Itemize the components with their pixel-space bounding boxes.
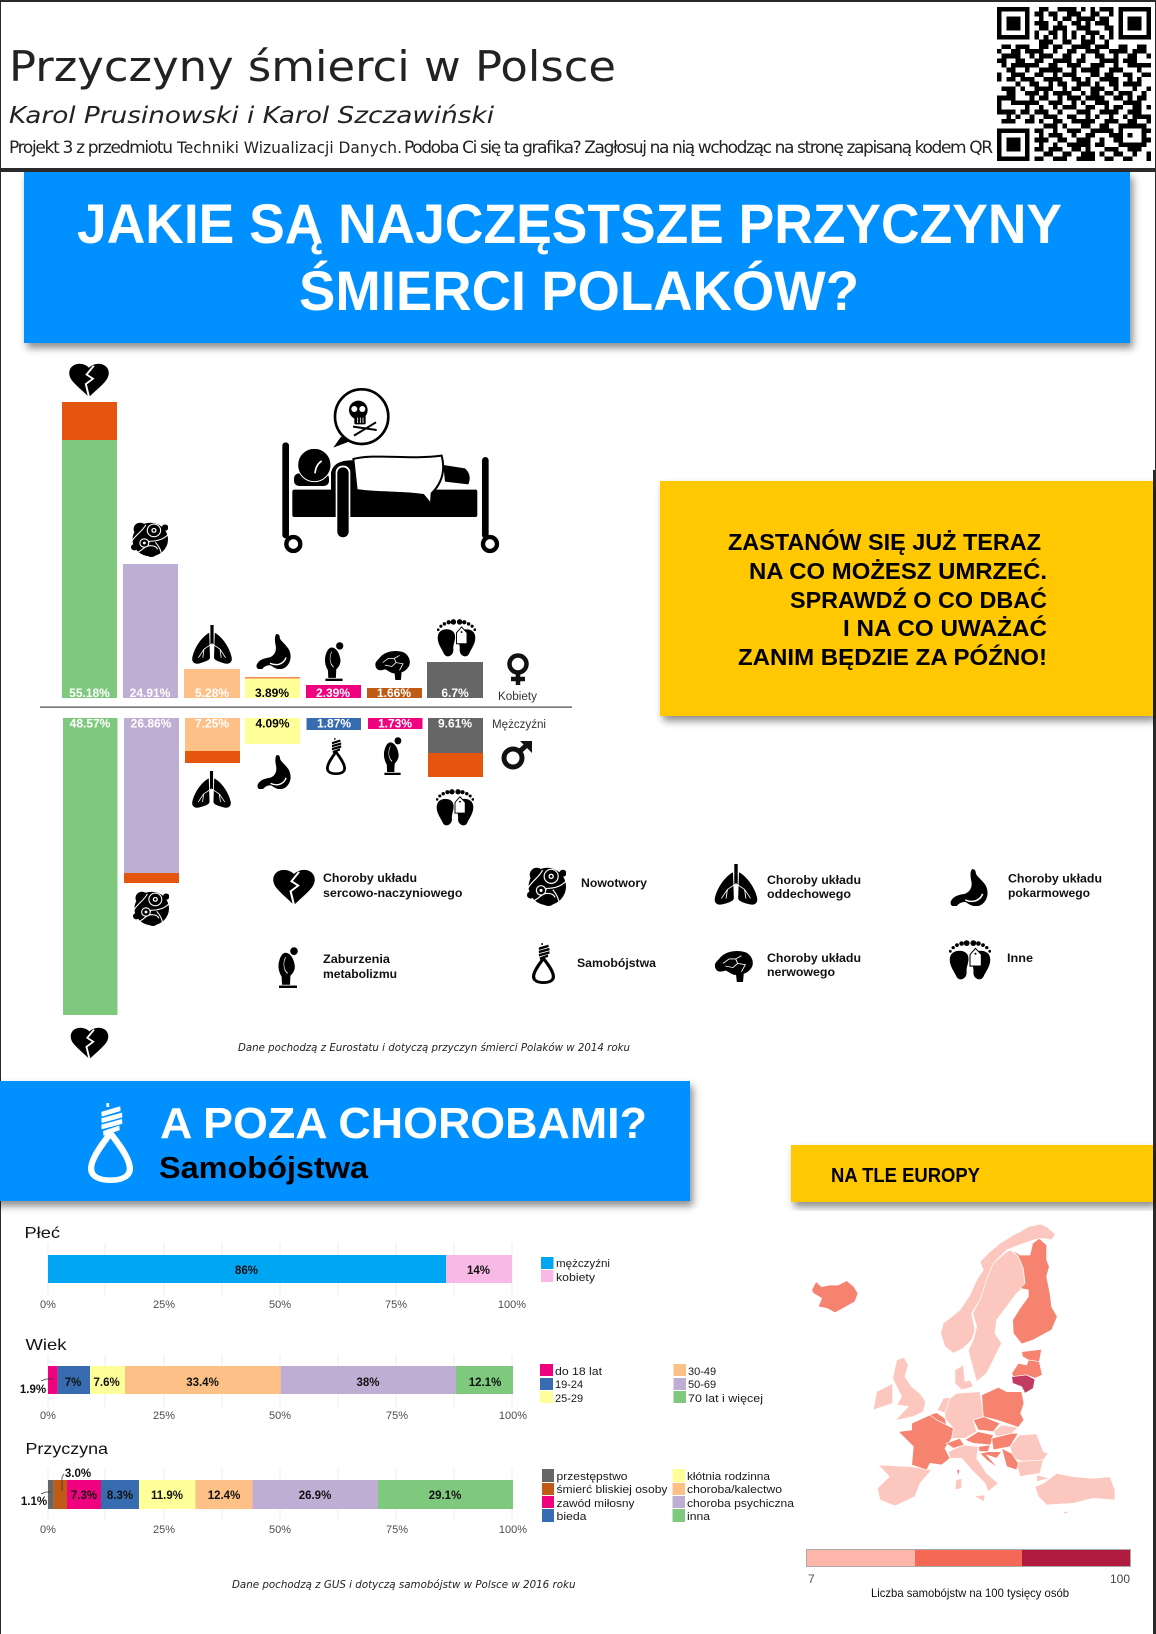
- source note: Eurostat: Dane pochodzą z Eurostatu i dotyczą przyczyn śmierci Polaków w 2014 roku: [238, 1041, 630, 1054]
- chart: age: 25-29: [555, 1393, 583, 1405]
- icon: mars: [504, 741, 532, 767]
- chart: age: 7%: [65, 1377, 81, 1389]
- chart: cause: [21, 1441, 795, 1536]
- chart: age: 38%: [356, 1377, 380, 1389]
- chart: cause: choroba/kalectwo: [687, 1484, 782, 1496]
- map: Europe: [812, 1224, 1115, 1514]
- icon: brain legend: [715, 951, 753, 982]
- legend text: nervous: [767, 951, 861, 979]
- chart: cause: przestępstwo: [556, 1471, 628, 1483]
- chart: age: 30-49: [688, 1366, 716, 1378]
- panel: main banner: [24, 172, 1130, 343]
- banner subheading: Samobójstwa: [159, 1150, 369, 1185]
- callout: think now: NA CO MOŻESZ UMRZEĆ.: [749, 557, 1047, 584]
- source note: GUS: Dane pochodzą z GUS i dotyczą samobójstw w Polsce w 2016 roku: [232, 1578, 576, 1591]
- panel: suicide banner: [0, 1081, 690, 1201]
- icon: metabolic men: [384, 737, 401, 775]
- icon: stomach women: [256, 634, 291, 669]
- chart: gender: 100%: [498, 1299, 526, 1311]
- legend text: nervous: nerwowego: [767, 965, 835, 979]
- chart: age: 25%: [153, 1410, 175, 1422]
- icon: feet legend: [949, 940, 991, 979]
- chart: age: 1.9%: [20, 1384, 46, 1396]
- heading: age: Wiek: [26, 1337, 68, 1354]
- chart: age: 19-24: [555, 1379, 583, 1391]
- chart: gender: 0%: [40, 1299, 56, 1311]
- chart: cause: kłótnia rodzinna: [687, 1471, 771, 1483]
- bar chart: women: 2.39%: [316, 686, 350, 700]
- legend text: digestive: pokarmowego: [1008, 886, 1090, 900]
- chart: age: 12.1%: [469, 1377, 501, 1389]
- bar chart: women: 3.89%: [255, 686, 289, 700]
- icon: metabolic women: [325, 642, 343, 681]
- chart: age: 75%: [386, 1410, 408, 1422]
- legend text: nervous: Choroby układu: [767, 951, 861, 965]
- chart: cause: choroba psychiczna: [687, 1498, 795, 1510]
- bar chart: women: 5.28%: [195, 686, 229, 700]
- legend text: digestive: Choroby układu: [1008, 872, 1102, 886]
- label: men: Mężczyźni: [492, 719, 546, 731]
- chart: gender: 75%: [385, 1299, 407, 1311]
- chart: cause: 7.3%: [71, 1490, 97, 1502]
- callout: think now: [660, 481, 1153, 716]
- icon: venus: [510, 656, 526, 685]
- chart: age: 100%: [499, 1410, 527, 1422]
- chart: gender: 14%: [467, 1265, 490, 1277]
- bar chart: men: 4.09%: [255, 716, 290, 730]
- icon: heart men: [71, 1028, 108, 1059]
- chart: cause: 100%: [499, 1524, 527, 1536]
- speech bubble with skull: [333, 389, 388, 448]
- bar chart: women: 55.18%: [69, 686, 110, 700]
- legend text: cardiovascular: sercowo-naczyniowego: [323, 886, 462, 900]
- bar chart: men: 1.87%: [317, 716, 351, 730]
- icon: brain women: [375, 651, 410, 680]
- bar chart: women: 1.66%: [377, 686, 411, 700]
- icon: heart women: [69, 364, 109, 397]
- chart: age: 50%: [269, 1410, 291, 1422]
- chart: cause: 12.4%: [208, 1490, 240, 1502]
- banner heading: ŚMIERCI POLAKÓW?: [299, 259, 859, 322]
- bar chart: men: [63, 716, 483, 1015]
- project note: Techniki Wizualizacji Danych.: [176, 138, 402, 157]
- chart: cause: 50%: [269, 1524, 291, 1536]
- chart: cause: 1.1%: [21, 1496, 47, 1508]
- chart: gender: 50%: [269, 1299, 291, 1311]
- legend text: respiratory: Choroby układu: [767, 873, 861, 887]
- icon: white noose: [88, 1103, 133, 1183]
- chart: gender: mężczyźni: [556, 1258, 610, 1270]
- icon: cancer legend: [527, 868, 566, 906]
- icon: heart legend: [273, 870, 315, 905]
- title: Przyczyny śmierci w Polsce: [9, 42, 616, 91]
- chart: cause: 3.0%: [65, 1468, 91, 1480]
- bar chart: women: 24.91%: [130, 686, 171, 700]
- chart: cause: 25%: [153, 1524, 175, 1536]
- axis divider: [40, 706, 572, 708]
- map legend: 7: [808, 1572, 815, 1586]
- legend text: cardiovascular: [323, 871, 462, 900]
- icon: lungs men: [192, 771, 231, 808]
- chart: cause: zawód miłosny: [556, 1498, 635, 1510]
- icon: patient in bed: [286, 389, 497, 551]
- chart: gender: kobiety: [556, 1272, 596, 1284]
- callout: think now: ZANIM BĘDZIE ZA PÓŹNO!: [738, 643, 1047, 670]
- chart: age: 70 lat i więcej: [688, 1393, 763, 1405]
- legend text: suicide: Samobójstwa: [577, 956, 656, 970]
- chart: age: [20, 1337, 763, 1422]
- banner heading: JAKIE SĄ NAJCZĘSTSZE PRZYCZYNY: [77, 192, 1062, 255]
- QR code: [997, 7, 1151, 161]
- chart: gender: 86%: [235, 1265, 258, 1277]
- callout: think now: ZASTANÓW SIĘ JUŻ TERAZ: [728, 528, 1041, 555]
- legend text: metabolic: [323, 952, 397, 981]
- chart: gender: [24, 1225, 610, 1311]
- legend text: cancer: Nowotwory: [581, 876, 647, 890]
- icon: noose legend: [532, 943, 555, 984]
- legend text: respiratory: [767, 873, 861, 901]
- bar chart: men: 1.73%: [378, 716, 412, 730]
- legend text: cardiovascular: Choroby układu: [323, 871, 417, 885]
- bar chart: men: 48.57%: [70, 716, 111, 730]
- legend text: digestive: [1008, 872, 1102, 900]
- project note: Projekt 3 z przedmiotu: [9, 138, 173, 158]
- icon: stomach men: [257, 755, 291, 789]
- heading: gender: Płeć: [24, 1225, 60, 1242]
- chart: gender: 25%: [153, 1299, 175, 1311]
- panel: Europe heading: NA TLE EUROPY: [831, 1164, 980, 1187]
- heading: cause: Przyczyna: [26, 1441, 108, 1458]
- header: [9, 7, 1151, 161]
- icon: metabolic legend: [278, 947, 298, 988]
- bar chart: men: 7.25%: [195, 716, 229, 730]
- legend text: metabolic: Zaburzenia: [323, 952, 390, 966]
- label: women: Kobiety: [498, 691, 537, 703]
- callout: think now: SPRAWDŹ O CO DBAĆ: [790, 586, 1047, 613]
- map legend: Liczba samobójstw na 100 tysięcy osób: [871, 1586, 1069, 1600]
- legend text: other: Inne: [1007, 951, 1033, 965]
- chart: age: 33.4%: [186, 1377, 219, 1389]
- map legend: 100: [1110, 1572, 1130, 1586]
- map legend: [806, 1549, 1131, 1600]
- chart: cause: 75%: [386, 1524, 408, 1536]
- chart: age: 50-69: [688, 1379, 716, 1391]
- chart: cause: 29.1%: [429, 1490, 461, 1502]
- callout: think now: I NA CO UWAŻAĆ: [843, 614, 1047, 641]
- chart: age: do 18 lat: [555, 1366, 602, 1378]
- icon: stomach legend: [951, 869, 988, 906]
- project note: Podoba Ci się ta grafika? Zagłosuj na nią wchodząc na stronę zapisaną kodem QR: [404, 138, 993, 158]
- chart: age: 7.6%: [93, 1377, 120, 1389]
- icon: cancer women: [131, 523, 168, 557]
- chart: cause: 0%: [40, 1524, 56, 1536]
- legend text: metabolic: metabolizmu: [323, 967, 397, 981]
- legend text: respiratory: oddechowego: [767, 887, 851, 901]
- icon: feet women: [437, 619, 476, 656]
- chart: cause: śmierć bliskiej osoby: [556, 1484, 668, 1496]
- banner heading: A POZA CHOROBAMI?: [160, 1099, 647, 1148]
- bar chart: women: [62, 402, 483, 700]
- panel: Europe heading: [791, 1145, 1153, 1202]
- icon: lungs legend: [715, 864, 757, 905]
- icon: cancer men: [133, 892, 169, 926]
- chart: cause: 26.9%: [299, 1490, 331, 1502]
- chart: cause: 8.3%: [107, 1490, 133, 1502]
- icon: lungs women: [192, 625, 232, 664]
- chart: cause: 11.9%: [151, 1490, 183, 1502]
- icon: feet men: [436, 789, 474, 825]
- bar chart: men: 26.86%: [131, 716, 172, 730]
- authors: Karol Prusinowski i Karol Szczawiński: [9, 103, 495, 129]
- bar chart: men: 9.61%: [438, 716, 472, 730]
- legend: causes: [273, 864, 1102, 988]
- chart: cause: inna: [687, 1511, 711, 1523]
- project note: [9, 138, 993, 158]
- chart: age: 0%: [40, 1410, 56, 1422]
- banner heading: [77, 192, 1062, 322]
- bar chart: women: 6.7%: [441, 686, 469, 700]
- chart: cause: bieda: [556, 1511, 587, 1523]
- icon: noose men: [326, 738, 346, 775]
